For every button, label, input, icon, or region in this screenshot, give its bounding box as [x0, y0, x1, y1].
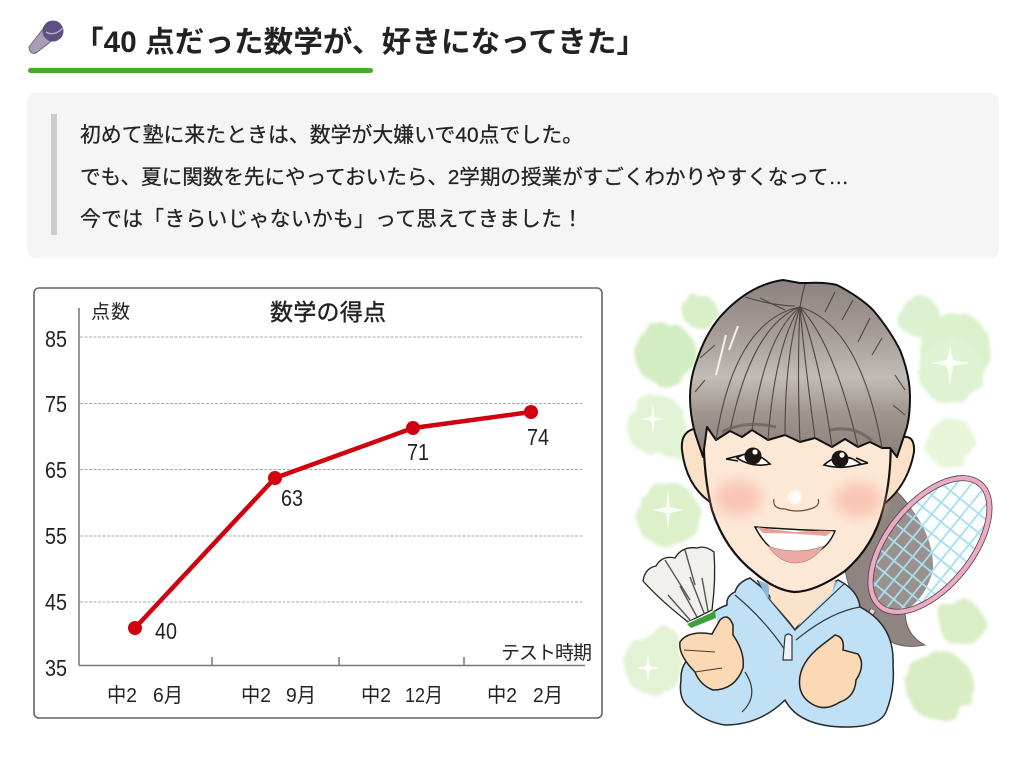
y axis labels: 65 [45, 457, 67, 483]
eyes [726, 448, 868, 468]
illustration: girl with badminton racket and shuttlecock [624, 280, 1024, 727]
hand holding shuttlecock [680, 617, 743, 690]
x axis labels: 中2 [107, 684, 137, 707]
score line [128, 405, 538, 635]
y axis labels: 45 [45, 589, 67, 615]
hair strands [695, 284, 905, 448]
data labels: 71 [407, 439, 429, 465]
icon: microphone [29, 20, 64, 53]
watercolor background blobs [624, 295, 990, 720]
x axis labels: 12月 [405, 685, 443, 707]
face [704, 400, 891, 592]
chart title: 数学の得点 [270, 299, 386, 325]
data labels: 40 [155, 618, 177, 644]
x axis labels: 中2 [487, 684, 517, 707]
title: 「40 点だった数学が、好きになってきた」 [74, 25, 646, 59]
hair ponytail [845, 480, 933, 646]
sparkles [636, 345, 970, 681]
inner hood shadows [758, 580, 838, 600]
shuttlecock [643, 547, 719, 636]
hoodie [680, 578, 893, 727]
y axis labels: 85 [45, 326, 67, 352]
hair highlight [716, 326, 738, 375]
nose [774, 490, 819, 511]
hood and zipper details [735, 580, 860, 712]
quote line 2: でも、夏に関数を先にやっておいたら、2学期の授業がすごくわかりやすくなって… [80, 166, 849, 189]
x axis labels: 中2 [241, 684, 271, 707]
quote line 3: 今では「きらいじゃないかも」って思えてきました！ [80, 208, 583, 231]
neck [768, 577, 836, 628]
y axis labels [45, 326, 67, 681]
y axis labels: 75 [45, 391, 67, 417]
finger lines [684, 650, 722, 672]
y axis labels: 55 [45, 523, 67, 549]
quote line 1: 初めて塾に来たときは、数学が大嫌いで40点でした。 [80, 124, 583, 147]
hair [690, 280, 910, 457]
x axis labels: 9月 [286, 685, 316, 707]
cheeks [714, 480, 882, 518]
panel: quote [27, 93, 999, 258]
racket [868, 475, 992, 615]
x axis labels: 6月 [153, 685, 183, 707]
x axis labels: 中2 [361, 684, 391, 707]
title underline [28, 68, 373, 73]
panel: line chart of math scores [34, 288, 602, 718]
x axis labels [107, 684, 563, 707]
x axis labels: 2月 [533, 685, 563, 707]
eyebrows [722, 424, 872, 441]
ears [682, 428, 914, 504]
fist with racket [799, 635, 862, 708]
y axis title: 点数 [91, 301, 130, 323]
data labels [155, 424, 549, 644]
x axis title: テスト時期 [501, 642, 592, 664]
y axis labels: 35 [45, 655, 67, 681]
data labels: 74 [527, 424, 549, 450]
data labels: 63 [281, 485, 303, 511]
mouth [755, 527, 835, 563]
